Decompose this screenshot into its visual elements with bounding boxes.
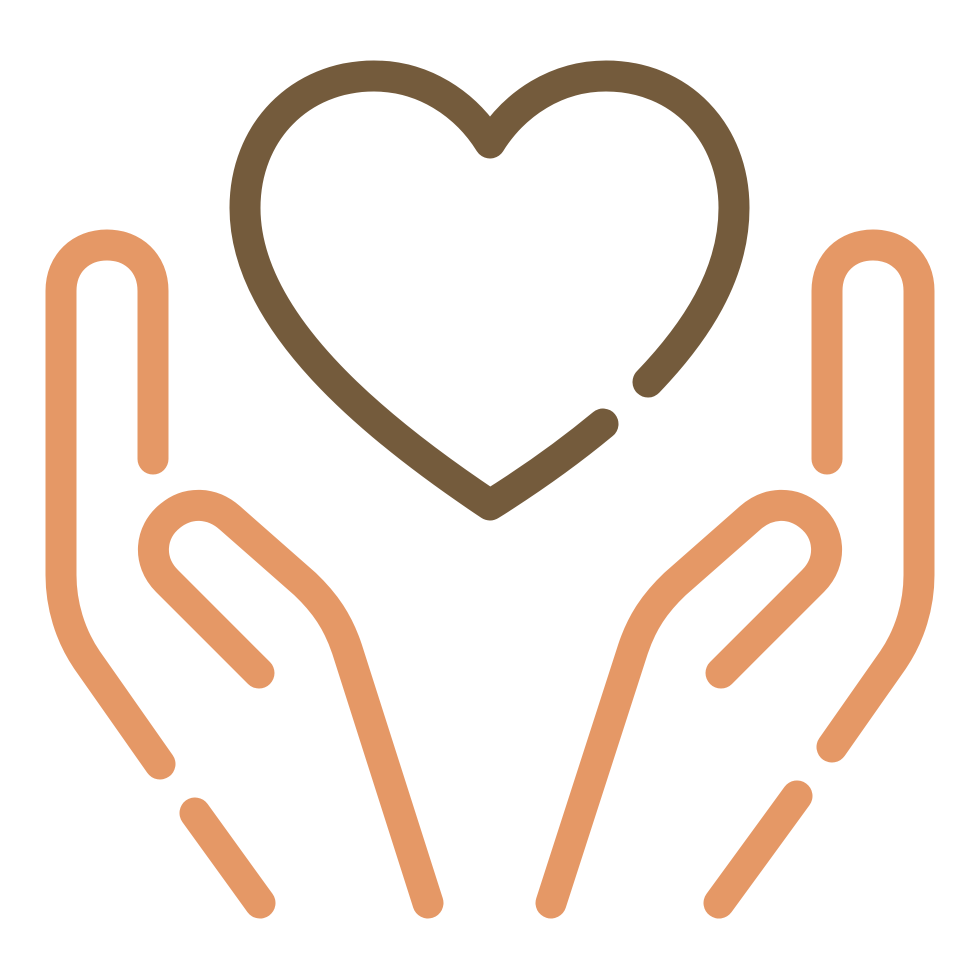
icon: right hand <box>551 245 919 903</box>
right hand thumb <box>551 505 827 903</box>
right hand wrist segment <box>719 796 797 903</box>
left hand outer finger <box>61 245 160 764</box>
left hand thumb <box>153 505 428 903</box>
icon: heart outline <box>245 76 734 505</box>
right hand outer finger <box>827 245 919 747</box>
icon: left hand <box>61 245 428 903</box>
left hand wrist segment <box>195 813 260 903</box>
